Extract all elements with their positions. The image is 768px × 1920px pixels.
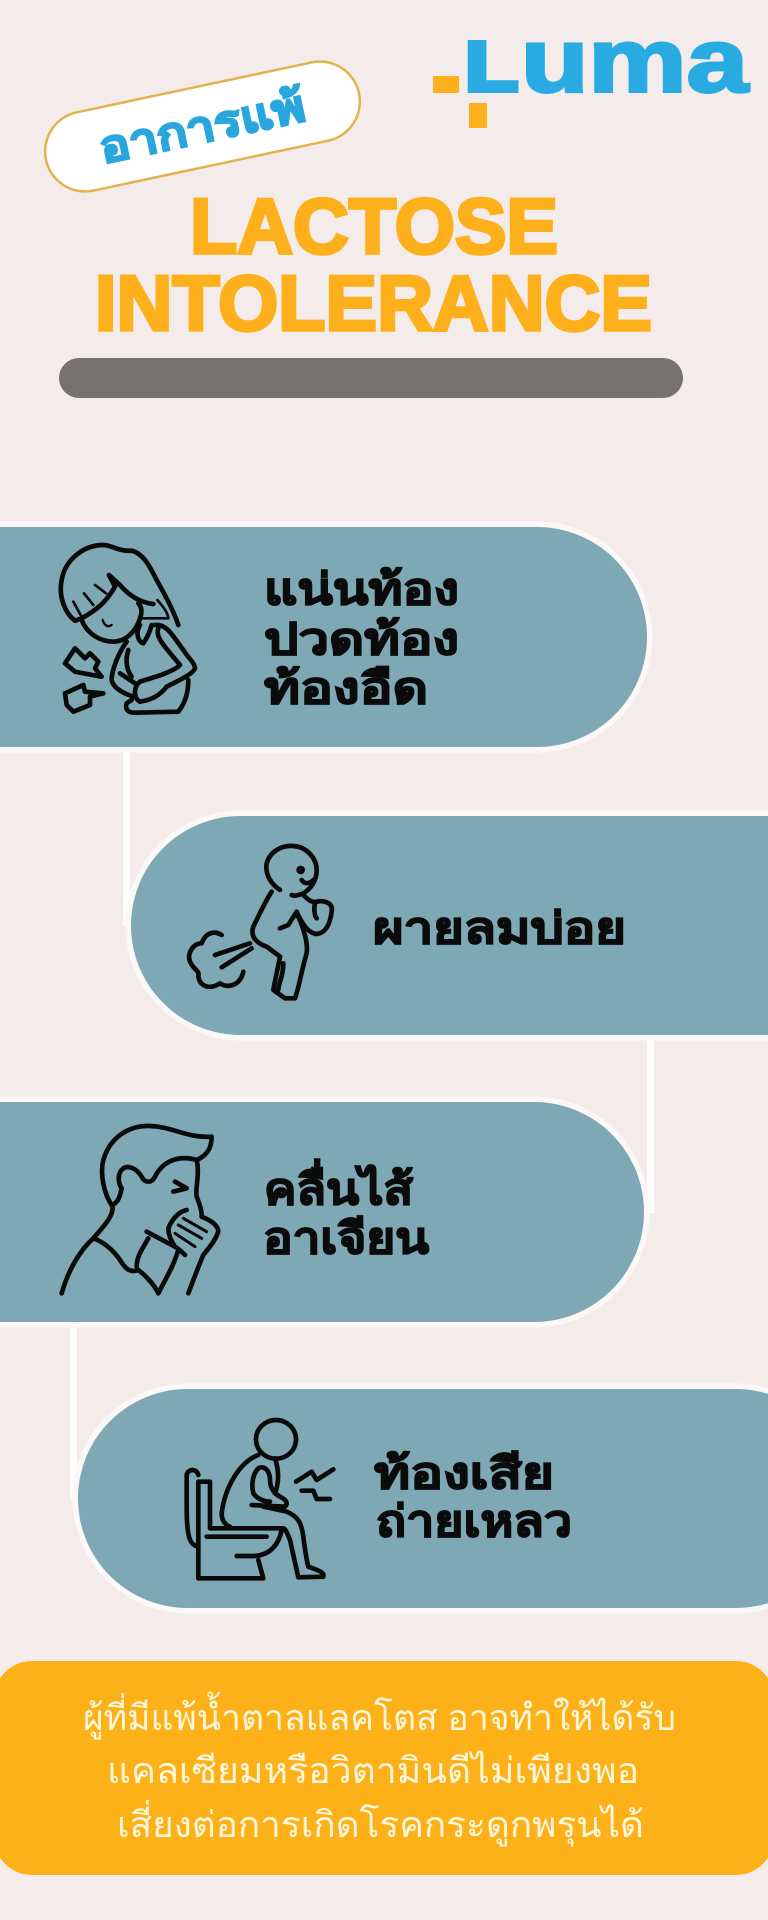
logo: Luma	[433, 12, 749, 128]
panel: คลื่นไส้ อาเจียน	[0, 1102, 644, 1322]
label: ปวดท้อง	[264, 616, 459, 664]
label: คลื่นไส้	[264, 1159, 414, 1214]
label: ท้องเสีย	[374, 1450, 554, 1498]
logo: Luma: uma	[521, 12, 749, 112]
grey bar	[59, 358, 683, 398]
title: INTOLERANCE	[95, 259, 652, 347]
summary text: เสี่ยงต่อการเกิดโรคกระดูกพรุนได้	[117, 1800, 644, 1847]
badge: อาการแพ้: อาการแพ้	[95, 82, 310, 173]
summary text	[83, 1691, 676, 1847]
panel: แน่นท้อง ปวดท้อง ท้องอืด	[0, 527, 647, 747]
title: LACTOSE	[190, 182, 558, 270]
label	[374, 1450, 572, 1546]
icon: man covering mouth	[62, 1126, 218, 1293]
panel: ท้องเสีย ถ่ายเหลว	[78, 1389, 768, 1608]
connector: panel 2 to panel 3	[647, 1033, 654, 1213]
connector: panel 3 to panel 4	[70, 1320, 77, 1500]
label	[263, 1159, 430, 1263]
summary text: แคลเซียมหรือวิตามินดีไม่เพียงพอ	[107, 1750, 639, 1791]
icon: woman holding stomach	[61, 545, 195, 713]
summary text: ผู้ที่มีแพ้น้ำตาลแลคโตส อาจทำให้ได้รับ	[83, 1691, 676, 1740]
icon: person on toilet	[187, 1420, 333, 1578]
label	[264, 566, 459, 713]
logo: Luma: L	[465, 28, 518, 106]
label: ผายลมบ่อย	[373, 905, 626, 953]
panel: summary note	[0, 1661, 768, 1875]
connector: panel 1 to panel 2	[123, 745, 130, 925]
title	[95, 182, 652, 347]
icon: person passing gas	[189, 846, 332, 998]
badge: อาการแพ้	[38, 54, 367, 199]
label: อาเจียน	[263, 1215, 430, 1263]
label: แน่นท้อง	[264, 566, 459, 614]
label: ถ่ายเหลว	[376, 1498, 572, 1546]
panel: ผายลมบ่อย	[131, 816, 768, 1035]
label: ท้องอืด	[264, 665, 428, 713]
